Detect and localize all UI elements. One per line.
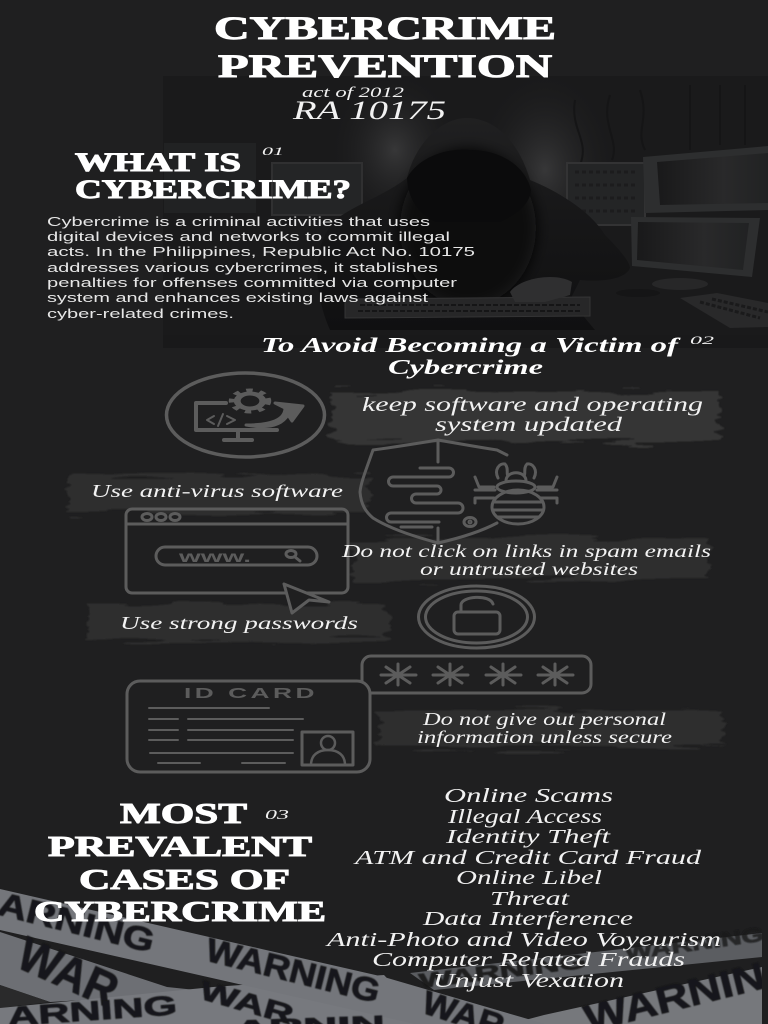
section 03 heading: CYBERCRIME — [34, 896, 326, 928]
section 03 heading: CASES OF — [79, 864, 290, 896]
tip text: keep software updated: system updated — [435, 414, 624, 436]
subtitle: act of 2012: act of 2012 — [302, 85, 405, 101]
section 03 heading: MOST — [120, 798, 247, 830]
warning tape photo — [0, 885, 768, 1024]
section 01 body text — [47, 215, 475, 321]
section 01 heading — [75, 144, 351, 204]
tip text: spam links: or untrusted websites — [420, 559, 638, 579]
title: PREVENTION — [218, 49, 552, 85]
tip text: spam links: Do not click on links in spam emails — [341, 541, 711, 561]
warning tape photo: WAR — [10, 928, 126, 1018]
icon: mouse cursor — [284, 584, 329, 613]
icon: software update — [166, 373, 324, 457]
icon: shield and bug — [360, 440, 557, 543]
title — [214, 11, 556, 85]
hacker photo background — [163, 70, 768, 348]
list of prevalent cybercrime cases: Identity Theft — [444, 826, 611, 848]
icon: padlock — [418, 586, 534, 648]
section 03 heading: PREVALENT — [48, 831, 312, 863]
warning tape photo: WARNING — [624, 924, 765, 965]
section 01 body text: digital devices and networks to commit illegal — [47, 230, 450, 244]
list of prevalent cybercrime cases: Unjust Vexation — [433, 970, 624, 992]
warning tape photo: WAR — [196, 975, 297, 1024]
icon: browser window — [126, 509, 348, 593]
brush: personal information — [378, 710, 722, 748]
tip text: personal information — [417, 709, 672, 747]
brush: anti-virus — [68, 476, 370, 513]
brush: keep software — [332, 391, 720, 441]
list of prevalent cybercrime cases — [324, 785, 721, 992]
subtitle: RA 10175: RA 10175 — [292, 96, 446, 125]
tip text: keep software updated — [362, 394, 703, 436]
icon: password field — [362, 656, 591, 693]
list of prevalent cybercrime cases: Online Libel — [456, 867, 603, 889]
tip text: personal information: information unless secure — [417, 727, 672, 747]
list of prevalent cybercrime cases: Online Scams — [444, 785, 613, 807]
list of prevalent cybercrime cases: Threat — [490, 888, 570, 910]
section 02 heading: To Avoid Becoming a Victim of — [261, 333, 681, 357]
tip text: keep software updated: keep software and operating — [362, 394, 703, 416]
tip text: spam links — [341, 541, 711, 579]
section 02 heading — [261, 333, 714, 379]
icon: browser window: www. — [177, 549, 251, 566]
section 01 body text: acts. In the Philippines, Republic Act No. 10175 — [47, 245, 475, 259]
section 01 body text: penalties for offenses committed via computer — [47, 276, 457, 290]
list of prevalent cybercrime cases: Computer Related Frauds — [372, 949, 685, 971]
list of prevalent cybercrime cases: ATM and Credit Card Fraud — [352, 847, 702, 869]
section 01 heading: CYBERCRIME? — [75, 175, 351, 204]
tip text: strong passwords: Use strong passwords — [120, 613, 358, 633]
tip text: anti-virus: Use anti-virus software — [91, 481, 343, 501]
list of prevalent cybercrime cases: Illegal Access — [447, 806, 602, 828]
section 03 heading: 03 — [265, 808, 289, 823]
warning tape photo: WARNING — [202, 931, 384, 1010]
section 01 heading: WHAT IS — [75, 148, 241, 177]
list of prevalent cybercrime cases: Anti-Photo and Video Voyeurism — [324, 929, 721, 951]
icon: ID card: ID CARD — [184, 685, 318, 702]
title: CYBERCRIME — [214, 11, 556, 47]
section 03 heading — [34, 798, 326, 928]
section 02 heading: Cybercrime — [388, 355, 543, 379]
brush: spam links — [352, 538, 707, 580]
warning tape photo: WARNING — [418, 951, 587, 993]
section 01 body text: system and enhances existing laws against — [47, 291, 429, 305]
section 01 body text: Cybercrime is a criminal activities that uses — [47, 215, 430, 229]
section 01 heading: 01 — [262, 144, 284, 158]
icon: ID card — [127, 681, 370, 772]
section 01 body text: cyber-related crimes. — [47, 307, 234, 321]
tip text: personal information: Do not give out personal — [422, 709, 666, 729]
brush: strong passwords — [88, 604, 388, 642]
section 02 heading: 02 — [690, 333, 714, 347]
section 01 body text: addresses various cybercrimes, it stablishes — [47, 261, 438, 275]
list of prevalent cybercrime cases: Data Interference — [422, 908, 633, 930]
